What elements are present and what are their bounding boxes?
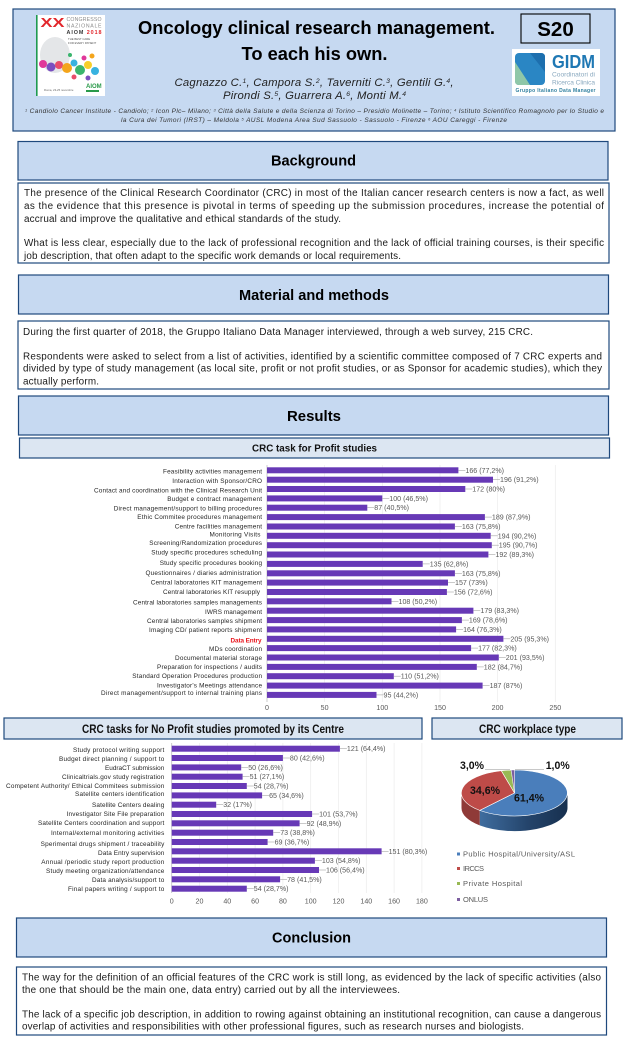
bar: Annual /periodic study report production: [41, 857, 361, 866]
bar: Competent Authority/ Ethical Commitees submission: [6, 782, 289, 790]
bar: Investigator Site File preparation: 101 (53,7%): [319, 810, 358, 818]
authors: 4: [402, 91, 406, 98]
bar: IWRS management: 179 (83,3%): [480, 607, 519, 615]
affiliations: Istituto Scientifico Romagnolo per lo Studio e: [457, 108, 604, 115]
bar: Contact and coordination: Contact and coordination with the Clinical Research Unit: [94, 487, 262, 494]
authors: 1: [242, 78, 246, 85]
bar: Study specific procedures booking: Study specific procedures booking: [160, 560, 262, 567]
bar: Sperimental drugs shipment / traceability: 69 (36,7%): [275, 838, 309, 846]
bar: Satellite centers identification: 65 (34,6%): [269, 792, 304, 800]
axis: no profit chart: 20: [196, 898, 203, 906]
bar: Internal/external monitoring activities: 73 (38,8%): [280, 829, 315, 837]
bar: Monitoring Visits: 194 (90,2%): [498, 532, 536, 540]
axis: profit chart: 100: [376, 704, 388, 712]
title: Oncology clinical research management.: [138, 18, 495, 38]
bar: Ethic Commitee procedures management: [137, 514, 531, 522]
bar: Interaction with Sponsor/CRO: [172, 476, 539, 485]
bar: Monitoring Visits: Monitoring Visits: [210, 531, 260, 538]
bar: Direct management/support to billing procedures: [114, 504, 409, 512]
bar: Data Entry supervision: 151 (80,3%): [389, 848, 427, 856]
bar: Central laboratories samples managements: Central laboratories samples managements: [133, 600, 262, 607]
bar: Ethic Commitee procedures management: Ethic Commitee procedures management: [137, 514, 262, 521]
code box: S20: S20: [537, 18, 574, 41]
bar: Screening/Randomization procedures: 195 (90,7%): [499, 542, 537, 550]
text block: methods: [18, 321, 609, 389]
bar: Data analysis/support to: [92, 876, 322, 884]
bar: Final papers writing / support to: [68, 885, 289, 893]
bar: Budget e contract management: [167, 495, 428, 503]
code box: S20: [521, 14, 590, 43]
bar: Centre facilities management: Centre facilities management: [175, 523, 262, 530]
text block: conclusion: The lack of a specific job description, in addition to rowing against obtaining an institutional recognition, can cause a dangerous: [22, 1010, 601, 1020]
panel: header: [13, 9, 615, 131]
affiliations: Icon Plc– Milano;: [154, 108, 213, 115]
bar: Satellite Centers coordination and support: [38, 820, 341, 828]
bar: Data Entry supervision: Data Entry supervision: [98, 850, 165, 857]
axis: no profit chart: 60: [251, 898, 259, 906]
text block: conclusion: [16, 967, 606, 1035]
heading: Conclusion: [16, 918, 606, 957]
authors: Cagnazzo C.: [174, 77, 242, 89]
subheading: CRC workplace type: CRC workplace type: [479, 722, 576, 736]
image: congress cover: XX: [40, 16, 65, 30]
bar: Clinicaltrials.gov study registration: Clinicaltrials.gov study registration: [62, 774, 165, 781]
bar: Satellite centers identification: [75, 791, 304, 800]
chart: workplace pie: [460, 760, 570, 831]
bar: EudraCT submission: EudraCT submission: [105, 765, 165, 772]
axis: no profit chart: 140: [360, 898, 372, 906]
axis: profit chart: 150: [434, 704, 446, 712]
axis: profit chart: 0: [265, 704, 269, 712]
bar: Budget e contract management: Budget e contract management: [167, 496, 262, 503]
authors: [174, 77, 454, 102]
bar: Screening/Randomization procedures: [149, 540, 537, 550]
bar: Internal/external monitoring activities: [51, 829, 315, 837]
image: congress cover: [36, 15, 105, 96]
bar: Data analysis/support to: 78 (41,5%): [287, 876, 322, 884]
authors: ,: [450, 77, 454, 89]
image: congress cover: NAZIONALE: [66, 23, 102, 29]
bar: Satellite Centers dealing: [92, 801, 252, 809]
bar: Study specific procedures scheduling: 192 (89,3%): [495, 551, 534, 559]
bar: Central laboratories samples shipment: [147, 617, 508, 625]
logo: GIDM: Gruppo Italiano Data Manager: [516, 88, 596, 94]
bar: Feasibility activities management: Feasibility activities management: [163, 469, 262, 476]
bar: Feasibility activities management: [163, 467, 504, 476]
affiliations: 2: [150, 108, 154, 112]
bar: Satellite centers identification: Satellite centers identification: [75, 791, 165, 798]
axis: no profit chart: 100: [305, 898, 317, 906]
text block: background: What is less clear, especially due to the lack of professional recognition and the lack of official training courses, is their specific: [24, 238, 604, 249]
image: congress cover: Roma, 23-25 novembre: [44, 88, 74, 92]
chart: workplace pie: 3,0%: [460, 760, 484, 772]
bar: IWRS management: [205, 607, 519, 616]
bar: Central laboratories samples managements: [133, 598, 437, 607]
bar: Interaction with Sponsor/CRO: Interaction with Sponsor/CRO: [172, 478, 262, 485]
logo: GIDM: [512, 49, 600, 96]
bar: Study specific procedures scheduling: [151, 549, 534, 559]
heading: Material and methods: Material and methods: [239, 288, 389, 304]
bar: Study specific procedures booking: 135 (62,8%): [430, 560, 468, 568]
bar: Questionnaires / diaries administration: 163 (75,8%): [462, 570, 501, 578]
subheading: CRC tasks for No Profit studies: CRC tasks for No Profit studies promoted by its Centre: [82, 722, 344, 736]
subheading: CRC task for Profit studies: [20, 438, 610, 458]
bar: Screening/Randomization procedures: Screening/Randomization procedures: [149, 540, 262, 547]
bar: Direct management/support to internal training plans: Direct management/support to internal training plans: [101, 690, 262, 697]
bar: Budget direct planning / support to: [59, 754, 325, 763]
bar: MDs coordination: 177 (82,3%): [478, 645, 517, 653]
bar: Contact and coordination: 172 (80%): [472, 486, 505, 494]
logo: GIDM: GIDM: [552, 52, 595, 72]
heading: Results: [18, 396, 608, 435]
bar: Clinicaltrials.gov study registration: [62, 773, 284, 781]
bar: Preparation for inspections / audits: Preparation for inspections / audits: [157, 664, 262, 671]
chart: workplace pie: 1,0%: [546, 760, 570, 772]
authors: , Campora S.: [246, 77, 316, 89]
text block: background: accrual and improve the qualitative and ethical standards of the study.: [24, 214, 341, 225]
bar: IWRS management: IWRS management: [205, 609, 262, 616]
heading: Conclusion: Conclusion: [272, 931, 351, 947]
logo: GIDM: Coordinatori di: [552, 72, 596, 78]
bar: Study meeting organization/attendance: [46, 866, 365, 875]
text block: methods: Respondents were asked to select from a list of activities, identified by a scientific committee composed of 7 CRC experts and: [23, 352, 602, 362]
bar: Standard Operation Procedures production: [132, 673, 439, 681]
bar: Data Entry supervision: [98, 848, 427, 857]
bar: Sperimental drugs shipment / traceability: Sperimental drugs shipment / traceability: [41, 841, 165, 848]
image: congress cover: AIOM: [86, 84, 102, 90]
text block: conclusion: the one that should be the main one, data entry) carried out by all the interviewees.: [22, 985, 400, 996]
heading: Material and methods: [18, 275, 608, 314]
bar: Satellite Centers coordination and support: 92 (48,9%): [307, 820, 341, 828]
bar: Sperimental drugs shipment / traceability: [41, 838, 309, 848]
bar: Investigator's Meetings attendance: 187 (87%): [490, 682, 522, 690]
axis: profit chart: [265, 704, 561, 712]
image: congress cover: CONGRESSO: [66, 17, 102, 23]
image: congress cover: AIOM 2018: [66, 30, 102, 36]
affiliations: la Cura dei Tumori (IRST) – Meldola: [121, 117, 239, 124]
bar: Central laboratories KIT management: [151, 579, 488, 587]
bar: Documental material storage: Documental material storage: [175, 655, 262, 662]
axis: no profit chart: 40: [223, 898, 231, 906]
bar: Competent Authority/ Ethical Commitees submission: 54 (28,7%): [254, 782, 289, 790]
bar: Annual /periodic study report production: 103 (54,8%): [322, 857, 361, 865]
bar: Final papers writing / support to: 54 (28,7%): [254, 885, 289, 893]
affiliations: AUSL Modena Area Sud Sassuolo - Sassuolo - Firenze: [244, 117, 428, 124]
logo: GIDM: Ricerca Clinica: [552, 80, 595, 86]
subheading: CRC workplace type: [432, 718, 622, 739]
authors: 3: [386, 78, 390, 85]
bar: Interaction with Sponsor/CRO: 196 (91,2%): [500, 476, 539, 484]
title: To each his own.: [242, 44, 388, 64]
bar: Central laboratories samples shipment: Central laboratories samples shipment: [147, 618, 262, 625]
bar: Study specific procedures booking: [160, 560, 468, 568]
axis: profit chart: 250: [549, 704, 561, 712]
bar: Investigator's Meetings attendance: [157, 682, 522, 690]
text block: conclusion: overlap of activities and responsibilities with other professional figures, such as research nurses and biologists.: [22, 1022, 524, 1032]
bar: Documental material storage: 201 (93,5%): [506, 654, 544, 662]
legend: workplace pie: ONLUS: [463, 895, 488, 904]
affiliations: 6: [428, 116, 431, 122]
bar: Data Entry: 205 (95,3%): [510, 635, 549, 643]
bar: Study meeting organization/attendance: Study meeting organization/attendance: [46, 868, 165, 875]
chart: no profit studies: [6, 743, 428, 906]
bar: Budget e contract management: 100 (46,5%): [389, 495, 428, 503]
bar: Investigator Site File preparation: [67, 810, 358, 818]
bar: Budget direct planning / support to: Budget direct planning / support to: [59, 756, 165, 763]
axis: no profit chart: 180: [416, 898, 428, 906]
bar: Monitoring Visits: [210, 531, 536, 540]
bar: Questionnaires / diaries administration: Questionnaires / diaries administration: [146, 570, 262, 577]
authors: 6: [346, 91, 350, 98]
text block: methods: During the first quarter of 2018, the Gruppo Italiano Data Manager interviewed, through a web survey, 215 CRC.: [23, 327, 533, 338]
affiliations: Candiolo Cancer Institute - Candiolo;: [28, 108, 151, 115]
bar: Feasibility activities management: 166 (77,2%): [465, 467, 504, 475]
authors: , Taverniti C.: [320, 77, 386, 89]
bar: Study meeting organization/attendance: 106 (56,4%): [326, 866, 365, 874]
axis: no profit chart: [170, 898, 428, 906]
axis: no profit chart: 120: [333, 898, 344, 906]
bar: Central laboratories KIT management: Central laboratories KIT management: [151, 579, 262, 586]
bar: Budget direct planning / support to: 80 (42,6%): [290, 754, 325, 762]
text block: background: The presence of the Clinical Research Coordinator (CRC) in most of the Italian cancer research centers is now a fact, as well: [24, 188, 604, 199]
heading: Background: [18, 142, 608, 180]
affiliations: [25, 108, 604, 124]
bar: MDs coordination: [209, 645, 517, 653]
text block: background: job description, that often adapt to the specific work demands or local requirements.: [23, 251, 401, 262]
authors: 2: [315, 78, 320, 85]
subheading: CRC tasks for No Profit studies: [4, 718, 422, 739]
chart: workplace pie: 61,4%: [514, 793, 544, 805]
text block: methods: actually perform.: [23, 376, 99, 388]
bar: Ethic Commitee procedures management: 189 (87,9%): [492, 514, 531, 522]
bar: Satellite Centers dealing: 32 (17%): [223, 801, 252, 809]
bar: Standard Operation Procedures production: 110 (51,2%): [401, 673, 439, 681]
bar: Central laboratories samples shipment: 169 (78,6%): [469, 617, 508, 625]
bar: Imaging CD/ patient reports shipment: 164 (76,3%): [463, 626, 502, 634]
title: [138, 18, 495, 64]
bar: Study protocol writing support: 121 (64,4%): [347, 745, 386, 753]
bar: Direct management/support to internal training plans: [101, 690, 418, 699]
bar: Direct management/support to billing procedures: Direct management/support to billing procedures: [114, 505, 262, 512]
text block: background: as the evidence that this presence is pivotal in terms of speeding up the submission procedures, increase the potential of: [24, 201, 604, 212]
affiliations: Città della Salute e della Scienza di Torino – Presidio Molinette – Torino;: [216, 108, 454, 115]
bar: Central laboratories KIT resupply: [163, 588, 493, 596]
bar: Data Entry: [230, 635, 549, 644]
affiliations: 1: [25, 108, 27, 112]
bar: Preparation for inspections / audits: [157, 663, 522, 671]
authors: , Gentili G.: [390, 77, 446, 89]
legend: workplace pie: [457, 850, 575, 904]
bar: Direct management/support to billing procedures: 87 (40,5%): [374, 504, 409, 512]
affiliations: AOU Careggi - Firenze: [431, 117, 507, 124]
bar: Study protocol writing support: Study protocol writing support: [73, 747, 165, 754]
authors: , Monti M.: [350, 90, 402, 102]
legend: workplace pie: IRCCS: [463, 864, 484, 873]
authors: 5: [274, 91, 278, 98]
bar: Contact and coordination: [94, 486, 505, 494]
image: congress cover: FOR EVERY PATIENT: [68, 41, 97, 45]
bar: Central laboratories KIT resupply: 156 (72,6%): [454, 588, 493, 596]
text block: methods: divided by type of study management (as local site, profit or not profit studies, or as Sponsor for academic studies), which they: [23, 364, 602, 374]
authors: Pirondi S.: [223, 90, 274, 102]
bar: EudraCT submission: 50 (26,6%): [248, 764, 283, 772]
axis: no profit chart: 0: [170, 898, 174, 906]
legend: workplace pie: Public Hospital/University/ASL: [463, 850, 575, 858]
chart: workplace pie: 34,6%: [470, 785, 500, 797]
bar: Standard Operation Procedures production: Standard Operation Procedures production: [132, 673, 262, 680]
bar: Central laboratories samples managements: 108 (50,2%): [398, 598, 437, 606]
bar: Final papers writing / support to: Final papers writing / support to: [68, 886, 165, 893]
subheading: CRC task for Profit studies: CRC task for Profit studies: [252, 443, 377, 455]
bar: Clinicaltrials.gov study registration: 51 (27,1%): [250, 773, 284, 781]
bar: Study specific procedures scheduling: Study specific procedures scheduling: [151, 549, 262, 556]
bar: Satellite Centers dealing: Satellite Centers dealing: [92, 802, 165, 809]
bar: Central laboratories KIT resupply: Central laboratories KIT resupply: [163, 589, 261, 596]
bar: Central laboratories KIT management: 157 (73%): [455, 579, 488, 587]
axis: profit chart: 200: [492, 704, 504, 712]
bar: Direct management/support to internal training plans: 95 (44,2%): [384, 691, 418, 699]
bar: Preparation for inspections / audits: 182 (84,7%): [484, 663, 522, 671]
bar: Data Entry: Data Entry: [230, 637, 262, 644]
chart: profit studies: [94, 465, 561, 712]
axis: no profit chart: 80: [279, 898, 287, 906]
bar: Annual /periodic study report production: Annual /periodic study report production: [41, 859, 165, 866]
heading: Background: Background: [271, 154, 356, 170]
bar: MDs coordination: MDs coordination: [209, 646, 262, 653]
bar: Study protocol writing support: [73, 745, 386, 754]
bar: Investigator Site File preparation: Investigator Site File preparation: [67, 811, 165, 818]
axis: profit chart: 50: [321, 704, 329, 712]
bar: Satellite Centers coordination and support: Satellite Centers coordination and support: [38, 820, 165, 827]
bar: Centre facilities management: 163 (75,8%): [462, 523, 501, 531]
bar: Internal/external monitoring activities: Internal/external monitoring activities: [51, 830, 164, 837]
text block: conclusion: The way for the definition of an official features of the CRC work is still long, as evidenced by the lack of specific activities (also: [22, 972, 602, 984]
affiliations: 5: [242, 116, 245, 122]
text block: background: [18, 183, 609, 263]
axis: no profit chart: 160: [388, 898, 400, 906]
image: congress cover: THE BEST CARE: [68, 37, 90, 41]
bar: Documental material storage: [175, 654, 544, 662]
affiliations: 4: [454, 108, 457, 112]
heading: Results: Results: [287, 409, 341, 425]
bar: Centre facilities management: [175, 523, 501, 531]
bar: Imaging CD/ patient reports shipment: Imaging CD/ patient reports shipment: [149, 627, 262, 634]
bar: Competent Authority/ Ethical Commitees submission: Competent Authority/ Ethical Commitees submission: [6, 783, 165, 790]
authors: , Guarrera A.: [278, 90, 346, 102]
authors: 4: [446, 78, 450, 85]
legend: workplace pie: Private Hospital: [463, 879, 522, 888]
bar: EudraCT submission: [105, 764, 283, 772]
bar: Questionnaires / diaries administration: [146, 570, 501, 578]
bar: Investigator's Meetings attendance: Investigator's Meetings attendance: [157, 682, 262, 689]
bar: Data analysis/support to: Data analysis/support to: [92, 877, 165, 884]
bar: Imaging CD/ patient reports shipment: [149, 626, 502, 634]
affiliations: 3: [213, 108, 216, 112]
